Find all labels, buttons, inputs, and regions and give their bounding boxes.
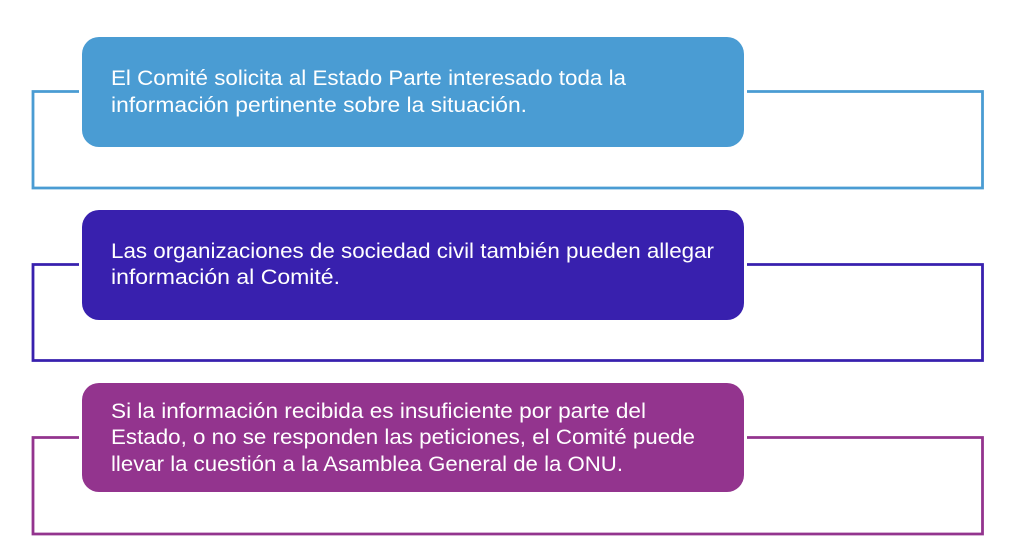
text: step 2: Las organizaciones de sociedad civil también pueden allegar bbox=[111, 239, 714, 263]
text: step 3 bbox=[111, 399, 695, 476]
text: step 3: llevar la cuestión a la Asamblea General de la ONU. bbox=[111, 452, 623, 476]
text: step 2: información al Comité. bbox=[111, 265, 340, 289]
text: step 2 bbox=[111, 239, 714, 289]
text: step 1: información pertinente sobre la situación. bbox=[111, 93, 527, 117]
panel: step 2 bbox=[33, 210, 982, 360]
box: step 3 bbox=[82, 383, 744, 492]
text: step 1 bbox=[111, 66, 626, 117]
text: step 3: Si la información recibida es insuficiente por parte del bbox=[111, 399, 646, 423]
connector bracket: step 2 bbox=[33, 264, 982, 360]
box: step 2 bbox=[82, 210, 744, 320]
text: step 1: El Comité solicita al Estado Parte interesado toda la bbox=[111, 66, 626, 90]
connector bracket: step 3 bbox=[33, 438, 982, 534]
panel: step 3 bbox=[33, 383, 982, 534]
connector bracket: step 1 bbox=[33, 92, 982, 188]
box: step 1 bbox=[82, 37, 744, 147]
text: step 3: Estado, o no se responden las peticiones, el Comité puede bbox=[111, 425, 695, 449]
panel: step 1 bbox=[33, 37, 982, 188]
